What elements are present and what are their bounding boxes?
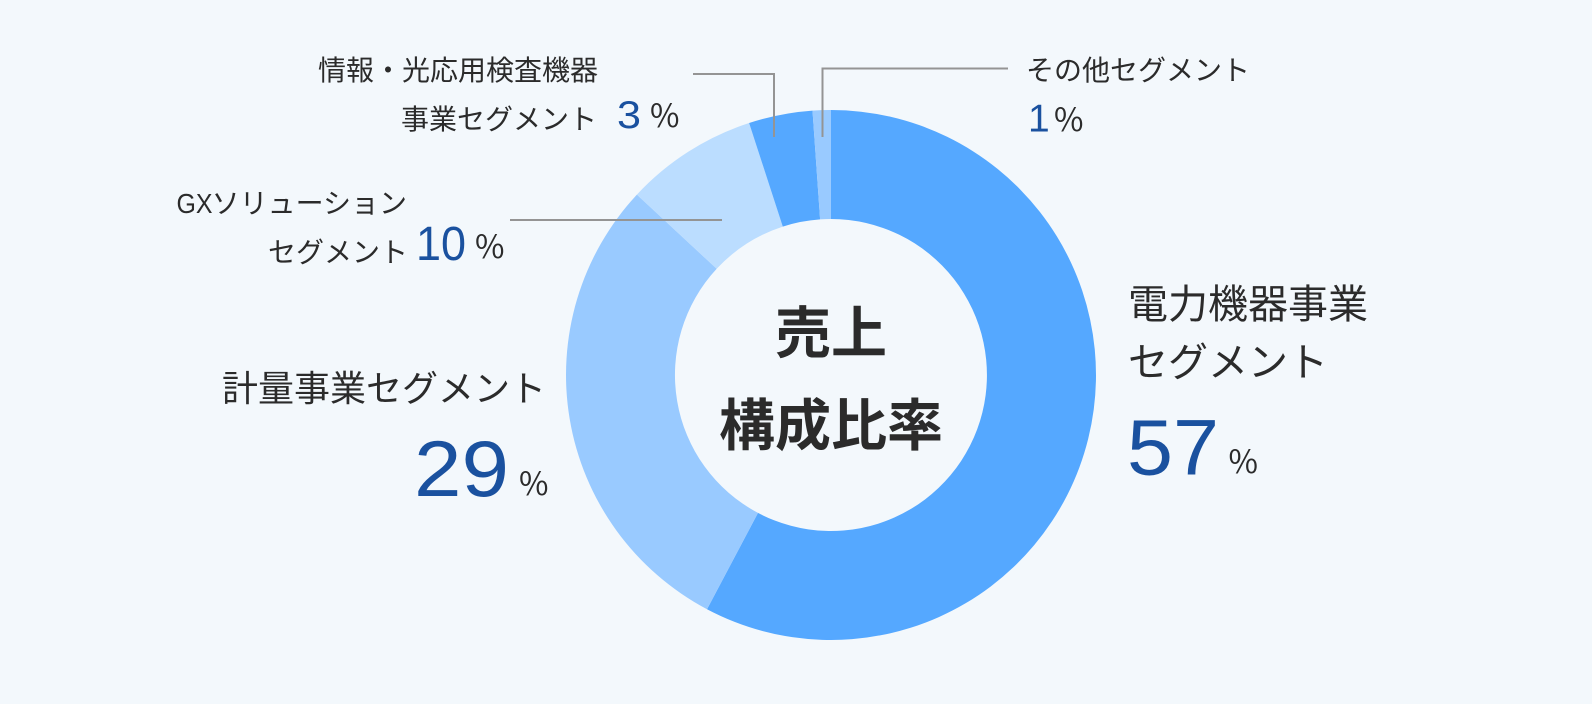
leader line: GX bbox=[510, 219, 722, 221]
label: その他セグメント 1% bbox=[1026, 49, 1250, 141]
label: その他セグメント 1%: 1 bbox=[1028, 98, 1050, 141]
label: 情報・光応用検査機器事業セグメント 3%: 3 bbox=[617, 94, 641, 137]
label: 計量事業セグメント 29%: 29 bbox=[414, 424, 509, 513]
label: GXソリューションセグメント 10%: セグメント bbox=[268, 231, 408, 271]
segment: 計量 29% bbox=[566, 195, 758, 609]
label: GXソリューションセグメント 10%: 10 bbox=[416, 218, 466, 271]
segment: GX 10% bbox=[637, 123, 783, 269]
center title: 売上 bbox=[775, 289, 887, 370]
center title: 構成比率 bbox=[719, 382, 943, 462]
label: 電力機器事業セグメント 57%: セグメント bbox=[1128, 330, 1328, 388]
label: 情報・光応用検査機器事業セグメント 3% bbox=[318, 49, 679, 138]
label: 情報・光応用検査機器事業セグメント 3%: 事業セグメント bbox=[401, 98, 597, 138]
label: 計量事業セグメント 29%: % bbox=[519, 459, 548, 505]
segment: 情報・光応用検査機器 3% bbox=[749, 111, 820, 227]
label: GXソリューションセグメント 10% bbox=[176, 182, 504, 271]
segment: その他 1% bbox=[812, 110, 831, 219]
label: GXソリューションセグメント 10%: ソリューション bbox=[212, 182, 407, 222]
label: 電力機器事業セグメント 57% bbox=[1127, 272, 1368, 492]
label: 情報・光応用検査機器事業セグメント 3%: 情報・光応用検査機器 bbox=[318, 49, 598, 89]
center title bbox=[719, 289, 943, 462]
donut chart bbox=[566, 110, 1096, 640]
label: 電力機器事業セグメント 57%: 電力機器事業 bbox=[1128, 272, 1368, 330]
label: GXソリューションセグメント 10%: % bbox=[475, 222, 504, 268]
label: 情報・光応用検査機器事業セグメント 3%: % bbox=[650, 91, 679, 137]
leader line: 情報・光応用検査機器 bbox=[693, 74, 774, 137]
label: 電力機器事業セグメント 57%: % bbox=[1228, 437, 1258, 483]
label: 電力機器事業セグメント 57%: 57 bbox=[1127, 402, 1219, 492]
leader line: その他 bbox=[822, 68, 1008, 137]
segment: 電力機器 57% bbox=[707, 110, 1096, 640]
label: その他セグメント 1%: % bbox=[1054, 95, 1083, 141]
label: その他セグメント 1%: その他セグメント bbox=[1026, 49, 1250, 89]
label: GXソリューションセグメント 10%: GX bbox=[176, 188, 213, 219]
label: 計量事業セグメント 29%: 計量事業セグメント bbox=[222, 360, 546, 412]
label: 計量事業セグメント 29% bbox=[222, 360, 548, 513]
